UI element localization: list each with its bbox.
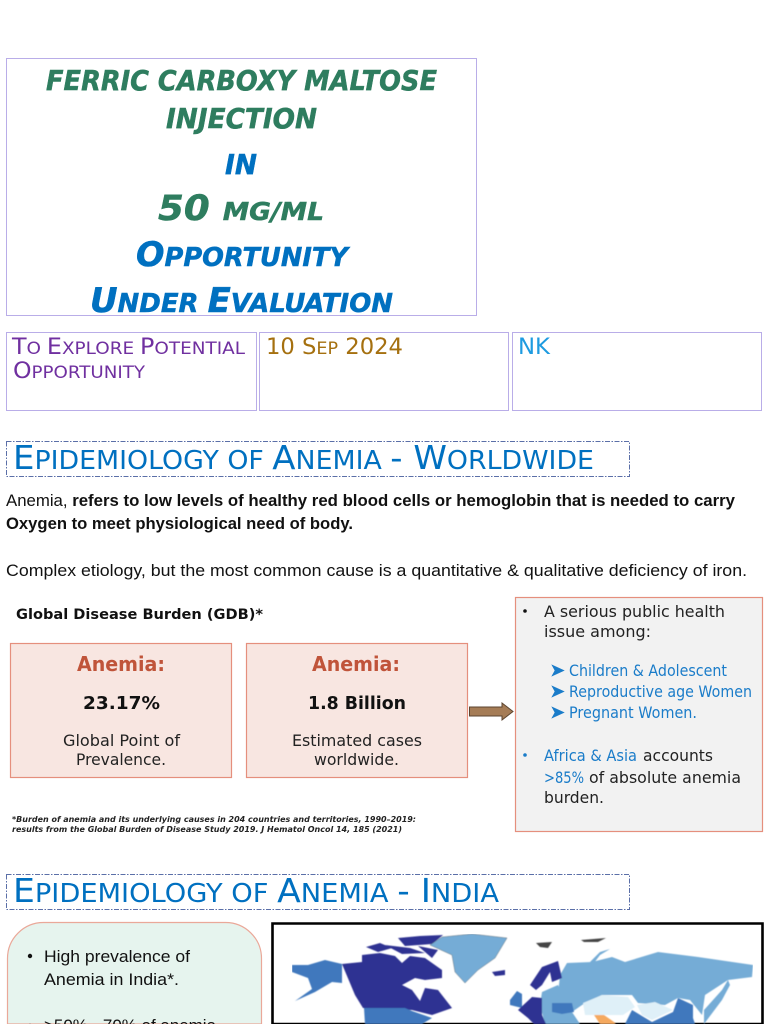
panel: author initials [512,332,762,410]
panel: public health issue: burden. [544,788,604,807]
map region: mongolia [637,1002,673,1020]
map region: iceland [492,970,505,976]
panel: title box [6,58,476,321]
panel: public health issue: of absolute anemia [589,768,741,787]
map region: arctic islands [536,938,606,948]
heading: epidemiology worldwide: EPIDEMIOLOGY OF ANEMIA - WORLDWIDE [13,438,594,477]
panel: cases stat: worldwide. [314,750,399,769]
map region: scandinavia [530,961,562,990]
title line: in: IN [225,149,257,181]
text block: anemia definition: Oxygen to meet physiological need of body. [6,514,353,533]
map region: canada [342,935,452,1015]
panel: public health issue: accounts [643,746,713,765]
panel: public health issue: >85% [544,768,584,787]
map region: eastern europe [540,985,580,1024]
panel: public health issue: A serious public health [544,602,725,621]
title line: dose: 50 MG/ML [158,189,324,229]
footnote: citation: *Burden of anemia and its underlying causes in 204 countries and territories, 1990–2019: [12,815,416,824]
list: affected groups [552,661,752,722]
map region: ukraine [552,1003,574,1014]
panel: date [260,332,508,410]
panel: prevalence stat: Anemia: [77,652,165,676]
arrow: to public health panel [470,703,513,720]
panel: cases stat: Anemia: [312,652,400,676]
map region: novaya zemlya [590,949,610,963]
heading: global disease burden: Global Disease Burden (GDB)* [16,607,264,623]
panel: purpose [6,332,256,410]
panel: author initials: NK [518,335,551,360]
panel: date: 10 SEP 2024 [266,335,403,360]
list: affected groups: Pregnant Women. [569,703,697,722]
map region: kazakhstan [583,995,635,1015]
panel: india prevalence [8,922,262,1024]
panel: purpose: TO EXPLORE POTENTIAL [11,335,246,360]
panel: india prevalence: Anemia in India*. [44,970,179,989]
panel: cases stat: 1.8 Billion [308,693,406,714]
chart: world map of anemia prevalence [272,924,762,1024]
panel: india prevalence: High prevalence of [44,947,190,966]
text block: anemia definition: Anemia, refers to low levels of healthy red blood cells or hemoglobin that is needed to carry [6,491,736,510]
map region: uk [510,991,522,1008]
text block: anemia definition [6,491,736,533]
heading: epidemiology india: EPIDEMIOLOGY OF ANEMIA - INDIA [13,871,499,910]
map region: uzbekistan [594,1015,616,1024]
map region: china [625,998,695,1024]
panel: public health issue [516,598,762,832]
title line: injection: INJECTION [166,103,317,135]
map region: greenland [430,934,507,983]
panel: prevalence stat: Global Point of [63,731,180,750]
panel: prevalence stat [10,644,232,778]
panel: cases stat [246,644,468,778]
panel: cases stat: Estimated cases [292,731,422,750]
panel: public health issue: issue among: [544,622,651,641]
map region: western europe [518,997,546,1024]
text block: etiology: Complex etiology, but the most common cause is a quantitative & qualitative deficiency of iron. [6,561,747,580]
map region: alaska [292,960,342,1001]
panel: prevalence stat: Prevalence. [76,750,166,769]
panel: purpose: OPPORTUNITY [13,359,146,384]
footnote: citation [12,815,416,834]
title line: opportunity: OPPORTUNITY [136,235,351,275]
title line: ferric carboxy maltose: FERRIC CARBOXY MALTOSE [46,65,437,97]
panel: public health issue: Africa & Asia [544,746,637,765]
footnote: citation: results from the Global Burden of Disease Study 2019. J Hematol Oncol 14, 185 (2021) [12,825,402,834]
list: affected groups: Children & Adolescent [569,661,727,680]
map region: russia [558,952,753,1015]
map region: usa [364,1008,432,1024]
map region: far east [704,980,730,1024]
panel: prevalence stat: 23.17% [83,693,160,714]
title line: under evaluation: UNDER EVALUATION [90,281,393,321]
